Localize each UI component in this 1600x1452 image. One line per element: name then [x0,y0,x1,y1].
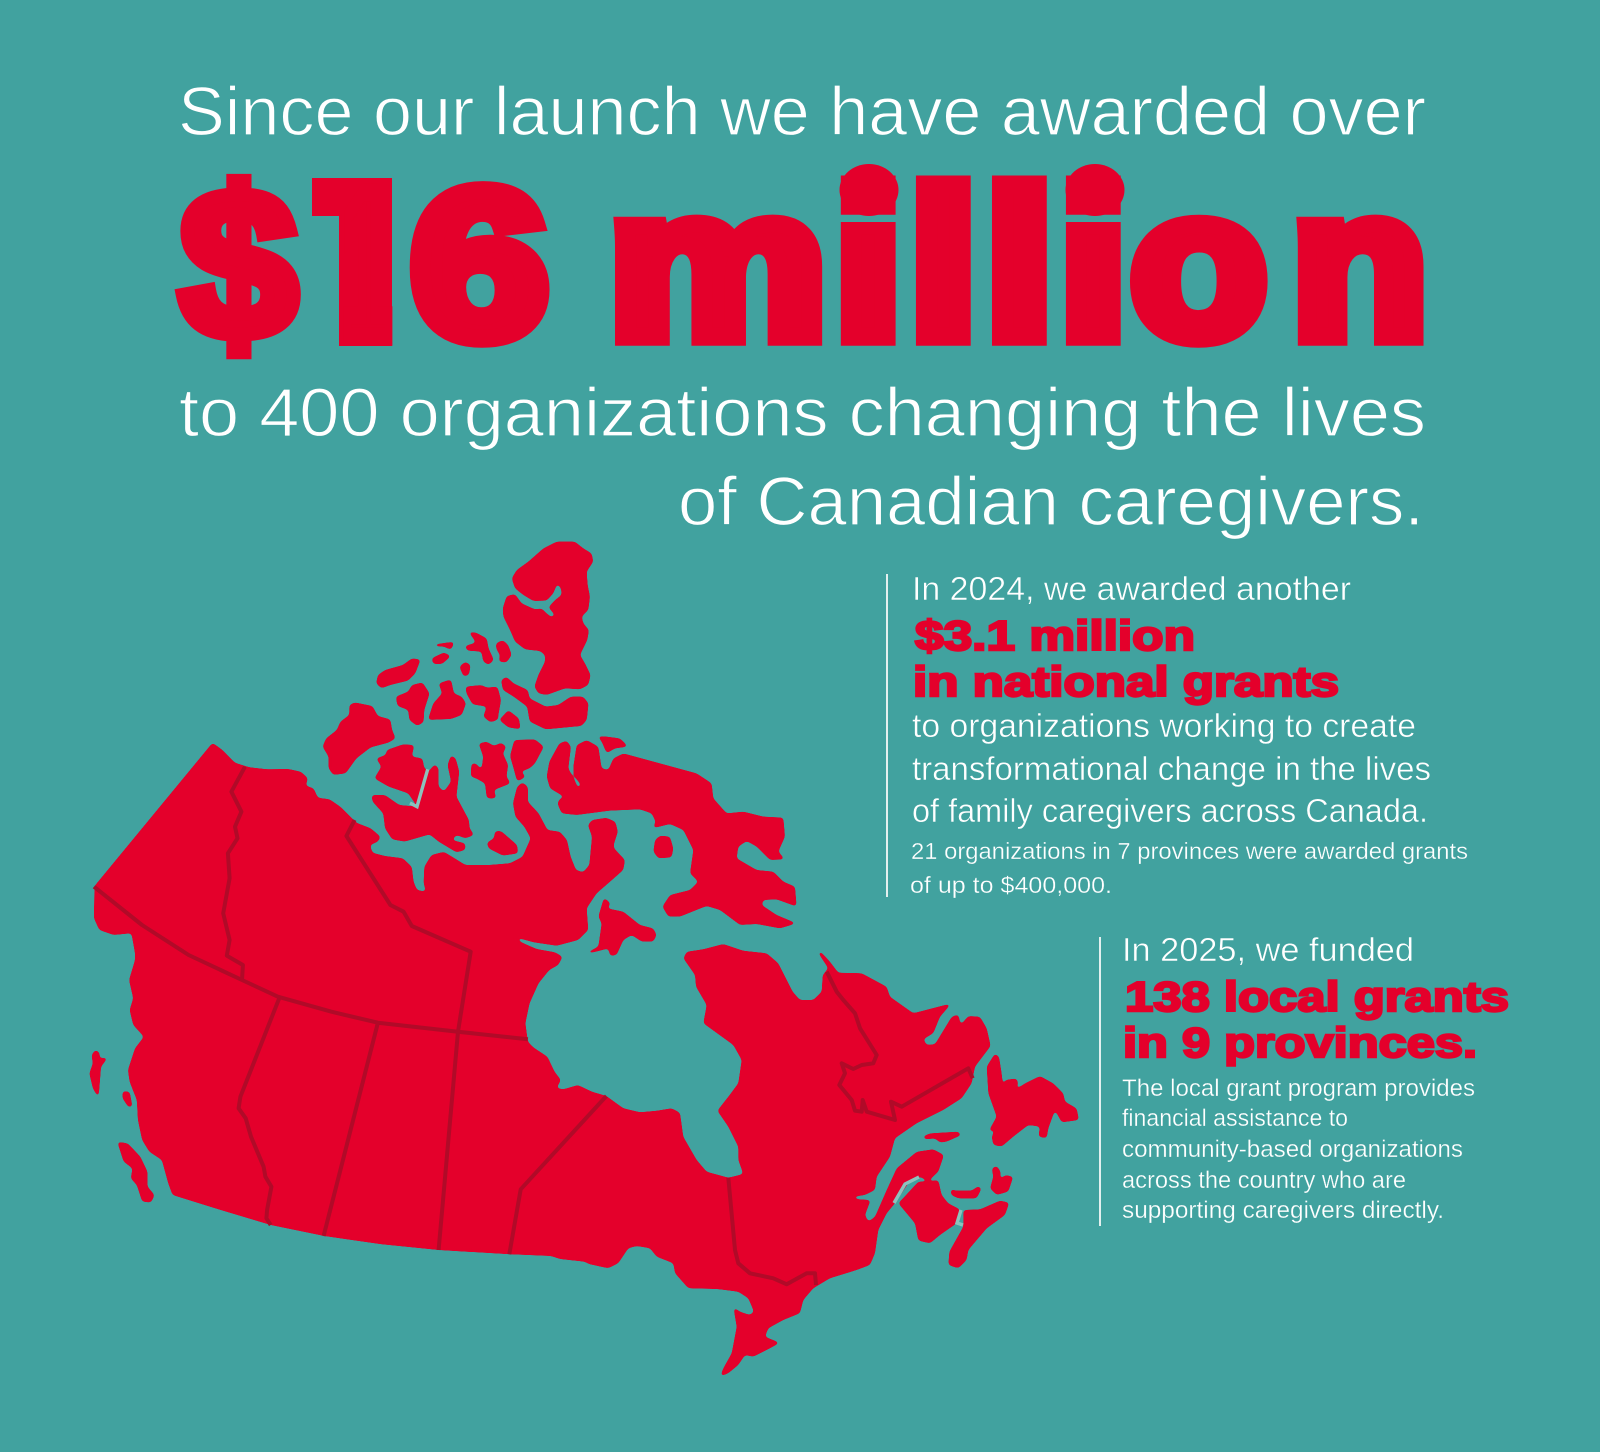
body text: across the country who are [1122,1167,1406,1194]
body text: of family caregivers across Canada. [912,792,1428,829]
highlight: in national grants: in national grants [913,658,1339,705]
highlight: 138 local grants: 138 local grants [1125,973,1509,1020]
Pacific islands [89,1049,155,1203]
Ellesmere and northern islands [503,542,797,956]
body text [912,707,1431,829]
body text: financial assistance to [1122,1105,1348,1132]
provincial borders [94,767,973,1285]
mainland [94,743,991,1377]
heading line: since our launch: Since our launch we have awarded over [178,73,1426,150]
Arctic archipelago [322,632,589,856]
divider line [886,574,888,897]
body text: transformational change in the lives [912,750,1431,787]
body text: community-based organizations [1122,1136,1463,1163]
body text: to organizations working to create [912,707,1416,744]
divider line [1099,937,1101,1226]
heading line: to 400 organizations: to 400 organizations changing the lives [179,374,1426,451]
big number: $16 million: milli [608,147,1128,382]
small print: 21 organizations in 7 provinces were awarded grants [911,838,1468,864]
title: headline statement [178,73,1428,540]
map landmass and islands [89,542,1079,1377]
big number: $16 million: 1 [342,148,391,382]
intro text: In 2025, we funded [1122,931,1414,968]
small print: of up to $400,000. [910,872,1112,898]
light channel lines [410,769,963,1225]
big number: $16 million [180,146,1428,382]
Atlantic provinces and islands [898,1053,1079,1268]
heading line: of Canadian caregivers: of Canadian caregivers. [678,463,1424,540]
big number: $16 million: on [1131,146,1428,381]
body text [1122,1075,1475,1224]
highlight: in 9 provinces: in 9 provinces. [1123,1019,1477,1066]
map of Canada [89,542,1079,1377]
panel: 2024 national grants [886,570,1468,898]
small print [910,838,1468,898]
big number: $16 million: 6 [411,147,548,382]
intro text: In 2024, we awarded another [912,570,1351,607]
panel: 2025 local grants [1099,931,1509,1226]
body text: The local grant program provides [1122,1075,1475,1102]
highlight: $3.1 million: $3.1 million [915,612,1195,659]
body text: supporting caregivers directly. [1122,1197,1444,1224]
big number: $16 million: $ [180,147,297,382]
